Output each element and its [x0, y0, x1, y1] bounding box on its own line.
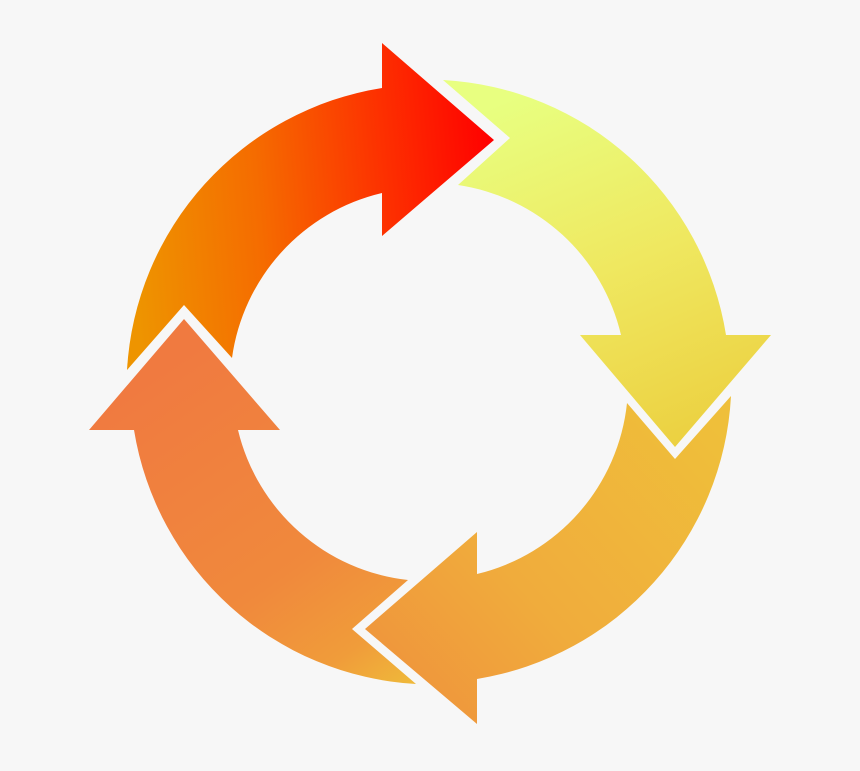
arrow: orange bottom-left	[89, 319, 416, 684]
arrow: gold bottom-right	[365, 396, 731, 724]
arrow: yellow top-right	[443, 80, 771, 447]
arrow: red top-left	[127, 43, 494, 370]
